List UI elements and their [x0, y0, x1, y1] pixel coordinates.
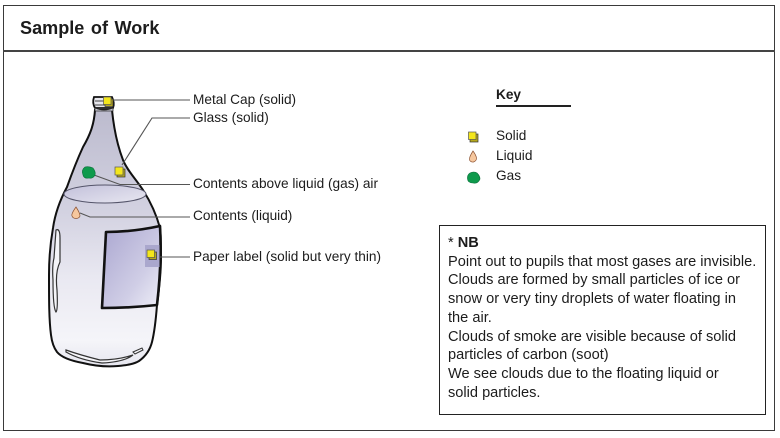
NB text: snow or very tiny droplets of water floating in — [448, 291, 736, 307]
icon: liquid on bottle — [72, 207, 80, 218]
left highlight — [53, 230, 60, 312]
label: contents above liquid: Contents above liquid (gas) air — [193, 176, 378, 191]
icon: gas on bottle — [82, 167, 95, 178]
label: glass: Glass (solid) — [193, 110, 269, 125]
paper label — [102, 226, 161, 308]
NB note panel — [439, 225, 766, 415]
NB text: Clouds of smoke are visible because of solid — [448, 329, 736, 345]
key underline — [496, 105, 571, 106]
NB text: Clouds are formed by small particles of ice or — [448, 272, 740, 288]
key heading: Key — [496, 87, 521, 102]
NB text: solid particles. — [448, 385, 540, 401]
label: contents liquid: Contents (liquid) — [193, 208, 292, 223]
bottle cap — [93, 97, 114, 111]
icon: solid on glass — [115, 167, 125, 177]
header divider — [3, 50, 775, 52]
liquid surface — [64, 185, 146, 203]
title: Sample of Work — [20, 18, 159, 38]
key icons — [467, 132, 480, 184]
NB text — [448, 254, 756, 401]
label: paper label: Paper label (solid but very thin) — [193, 249, 381, 264]
NB text: particles of carbon (soot) — [448, 347, 609, 363]
NB text: the air. — [448, 310, 492, 326]
key item: gas: Gas — [496, 168, 521, 183]
bottle body — [49, 97, 161, 366]
leader lines — [80, 100, 190, 257]
icon: solid on label — [145, 245, 160, 267]
key item: solid: Solid — [496, 128, 526, 143]
NB text: We see clouds due to the floating liquid or — [448, 366, 719, 382]
label: metal cap: Metal Cap (solid) — [193, 92, 296, 107]
key panel — [467, 87, 571, 184]
key item: liquid: Liquid — [496, 148, 532, 163]
NB heading: * NB — [448, 235, 479, 251]
NB text: Point out to pupils that most gases are invisible. — [448, 254, 756, 270]
bottom highlight — [66, 350, 133, 363]
icon: solid on cap — [104, 97, 113, 106]
